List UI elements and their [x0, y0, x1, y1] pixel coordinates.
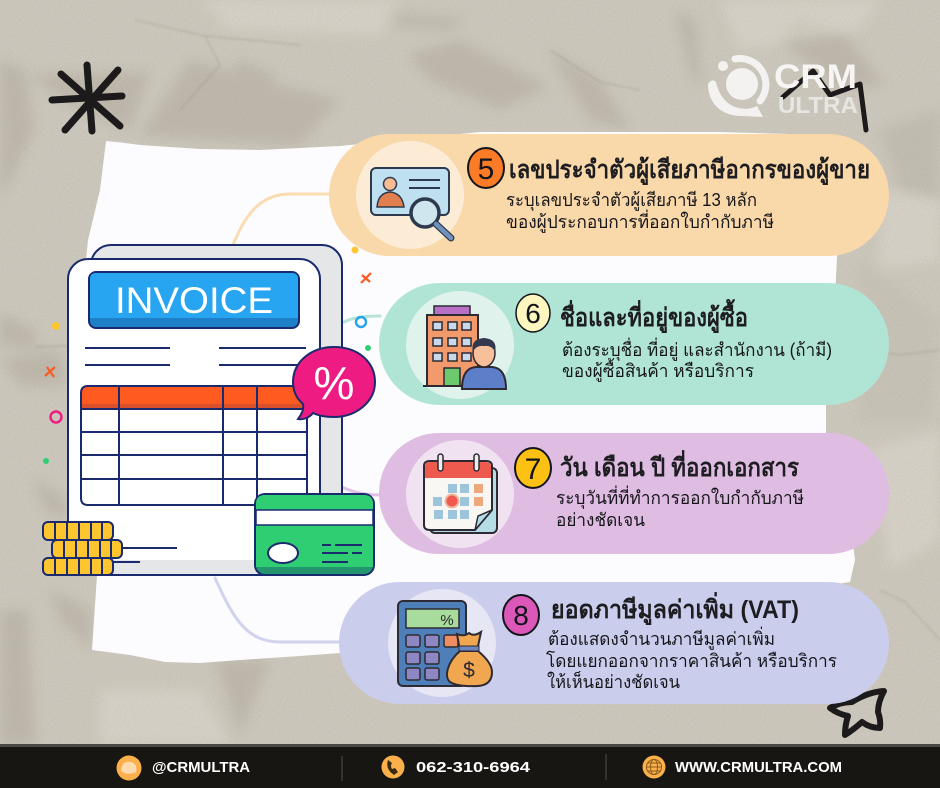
- number badge 8: [503, 595, 539, 635]
- logo text CRM: CRM: [774, 58, 857, 96]
- logo text ULTRA: ULTRA: [778, 92, 858, 118]
- heading 8: ยอดภาษีมูลค่าเพิ่ม (VAT): [551, 592, 799, 626]
- front sheet: [68, 259, 320, 575]
- text 8: [546, 626, 837, 692]
- icon: calculator and money bag: %: [440, 612, 454, 629]
- confetti decorations: [43, 246, 371, 464]
- number badge 6: 6: [525, 298, 541, 329]
- phone: [382, 756, 531, 778]
- text 8: ให้เห็นอย่างชัดเจน: [547, 670, 680, 692]
- torn white paper sheet: [80, 132, 855, 663]
- coins: [43, 522, 177, 575]
- table: [81, 386, 307, 505]
- text 7: อย่างชัดเจน: [556, 510, 645, 530]
- icon: calculator and money bag: [398, 601, 492, 686]
- logo: CRM Ultra: [708, 58, 866, 130]
- number badge 7: [515, 448, 551, 488]
- number badge 8: 8: [513, 600, 529, 631]
- text 5: ระบุเลขประจำตัวผู้เสียภาษี 13 หลัก: [506, 190, 757, 211]
- text 6: ของผู้ซื้อสินค้า หรือบริการ: [562, 358, 754, 382]
- heading 7: วัน เดือน ปี ที่ออกเอกสาร: [560, 450, 800, 482]
- panel 8: VAT amount: [339, 582, 889, 704]
- icon: building and person: [423, 306, 506, 389]
- percent bubble: %: [314, 357, 354, 409]
- invoice title button: [89, 272, 299, 328]
- footer bar: [0, 744, 940, 788]
- website: [642, 756, 842, 778]
- icon: calculator and money bag: $: [463, 659, 475, 682]
- number badge 7: 7: [525, 453, 541, 486]
- icon: calendar: [424, 454, 497, 533]
- text 7: [556, 485, 804, 530]
- percent bubble: [293, 347, 375, 419]
- scribble behind logo: [783, 71, 866, 130]
- connector lines: [215, 194, 380, 642]
- social handle: [116, 756, 250, 780]
- text 8: ต้องแสดงจำนวนภาษีมูลค่าเพิ่ม: [548, 626, 775, 650]
- heading 5: เลขประจำตัวผู้เสียภาษีอากรของผู้ขาย: [509, 156, 870, 186]
- invoice title button: INVOICE: [115, 280, 273, 321]
- panel 7: issue date: [379, 433, 889, 554]
- text 6: [562, 337, 832, 382]
- social handle: @CRMULTRA: [152, 759, 250, 776]
- text 6: ต้องระบุชื่อ ที่อยู่ และสำนักงาน (ถ้ามี): [562, 337, 832, 361]
- website: WWW.CRMULTRA.COM: [675, 759, 842, 776]
- number badge 5: [468, 148, 504, 188]
- icon: ID card with magnifier: [371, 168, 451, 238]
- panel 6: buyer name and address: [379, 283, 889, 405]
- text 7: ระบุวันที่ที่ทำการออกใบกำกับภาษี: [556, 485, 804, 509]
- back sheet: [91, 245, 342, 545]
- icon: star doodle: [830, 691, 884, 735]
- number badge 6: [516, 294, 550, 332]
- panel 5: seller tax ID: [329, 134, 889, 256]
- credit card: [255, 494, 374, 575]
- text 5: [506, 190, 774, 233]
- heading 6: ชื่อและที่อยู่ของผู้ซื้อ: [560, 298, 748, 334]
- text 8: โดยแยกออกจากราคาสินค้า หรือบริการ: [546, 650, 837, 671]
- invoice illustration: [43, 245, 375, 575]
- logo mark: [708, 59, 766, 117]
- phone: 062-310-6964: [416, 759, 531, 776]
- text lines: [85, 348, 306, 365]
- number badge 5: 5: [478, 153, 494, 186]
- text 5: ของผู้ประกอบการที่ออกใบกำกับภาษี: [506, 209, 774, 233]
- icon: asterisk doodle: [52, 65, 122, 131]
